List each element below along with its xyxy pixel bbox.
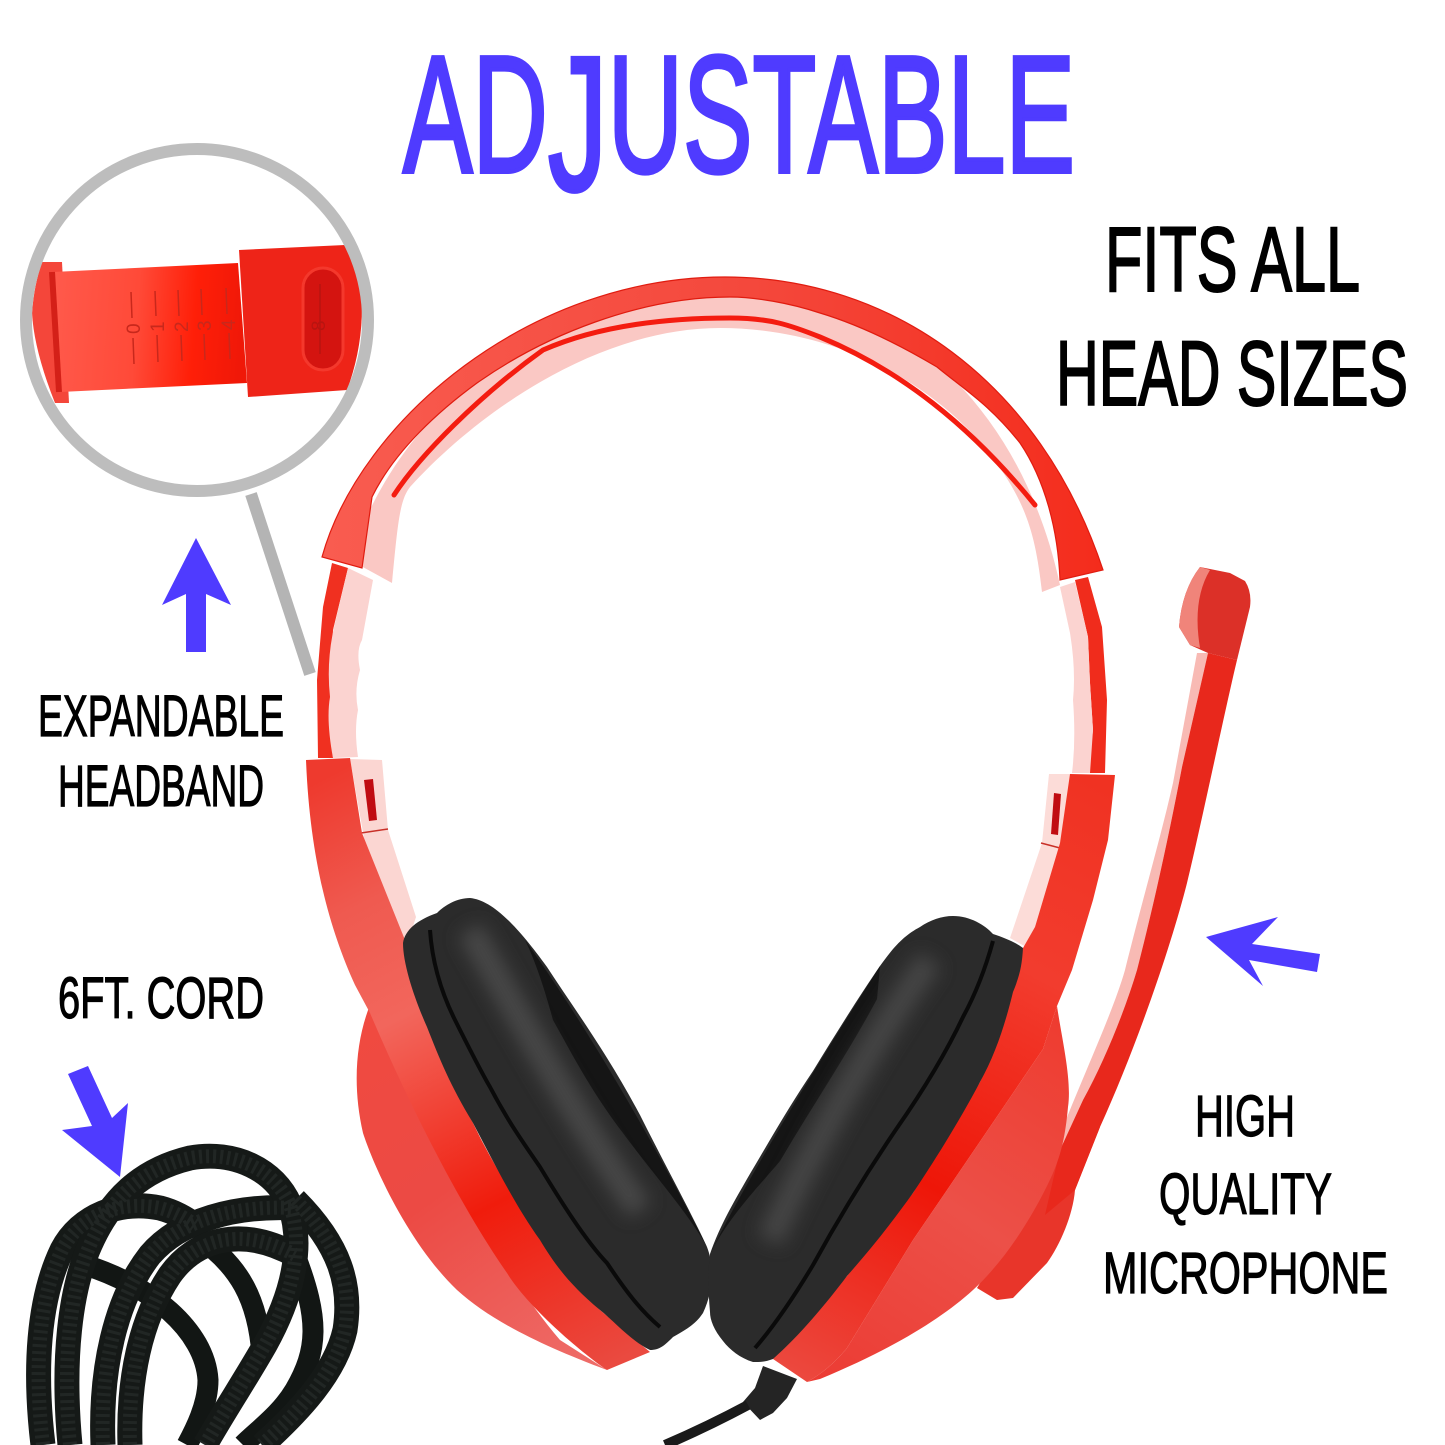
- label: high quality microphone: [1103, 1084, 1388, 1306]
- title: AD: [403, 22, 635, 208]
- right ear cup shell: [773, 774, 1115, 1382]
- arrow: up to magnifier: [162, 538, 231, 652]
- red strap slider with oval button: 8: [309, 320, 330, 331]
- left ear cup shell: [306, 758, 650, 1370]
- red strap middle with scale: 2: [172, 321, 193, 332]
- arrow: to microphone: [1206, 917, 1320, 986]
- red strap end cap: [32, 262, 69, 403]
- red strap middle with scale: 1: [148, 321, 169, 332]
- left slider: [317, 563, 373, 758]
- title: USTABLE: [608, 22, 1075, 208]
- red strap middle with scale: 3: [195, 320, 216, 331]
- label: expandable headband: EXPANDABLE: [38, 684, 284, 749]
- label: high quality microphone: HIGH: [1195, 1084, 1295, 1149]
- label: 6ft cord: 6FT. CORD: [58, 966, 264, 1031]
- label: high quality microphone: QUALITY: [1159, 1162, 1332, 1227]
- magnifier inset: headband detail: [26, 149, 368, 674]
- red strap middle with scale: [52, 263, 247, 392]
- right slider: [1060, 577, 1107, 773]
- microphone boom: [977, 567, 1250, 1300]
- headband arc: [322, 277, 1103, 592]
- magnifier ring: [26, 149, 368, 491]
- red strap middle with scale: 0: [124, 323, 145, 334]
- label: expandable headband: [38, 684, 284, 819]
- red strap middle with scale: 4: [219, 319, 240, 330]
- headset: [306, 277, 1250, 1445]
- arrow: to cord: [62, 1066, 128, 1177]
- red strap slider with oval button: [239, 245, 362, 397]
- braided cord: [39, 1156, 347, 1445]
- heading: fits all head sizes: [1056, 209, 1408, 425]
- title: J: [548, 16, 608, 231]
- left ear pad: [403, 898, 712, 1350]
- headset cable: [665, 1366, 797, 1445]
- magnifier handle: [251, 494, 310, 674]
- label: expandable headband: HEADBAND: [58, 754, 264, 819]
- right ear pad: [708, 916, 1023, 1362]
